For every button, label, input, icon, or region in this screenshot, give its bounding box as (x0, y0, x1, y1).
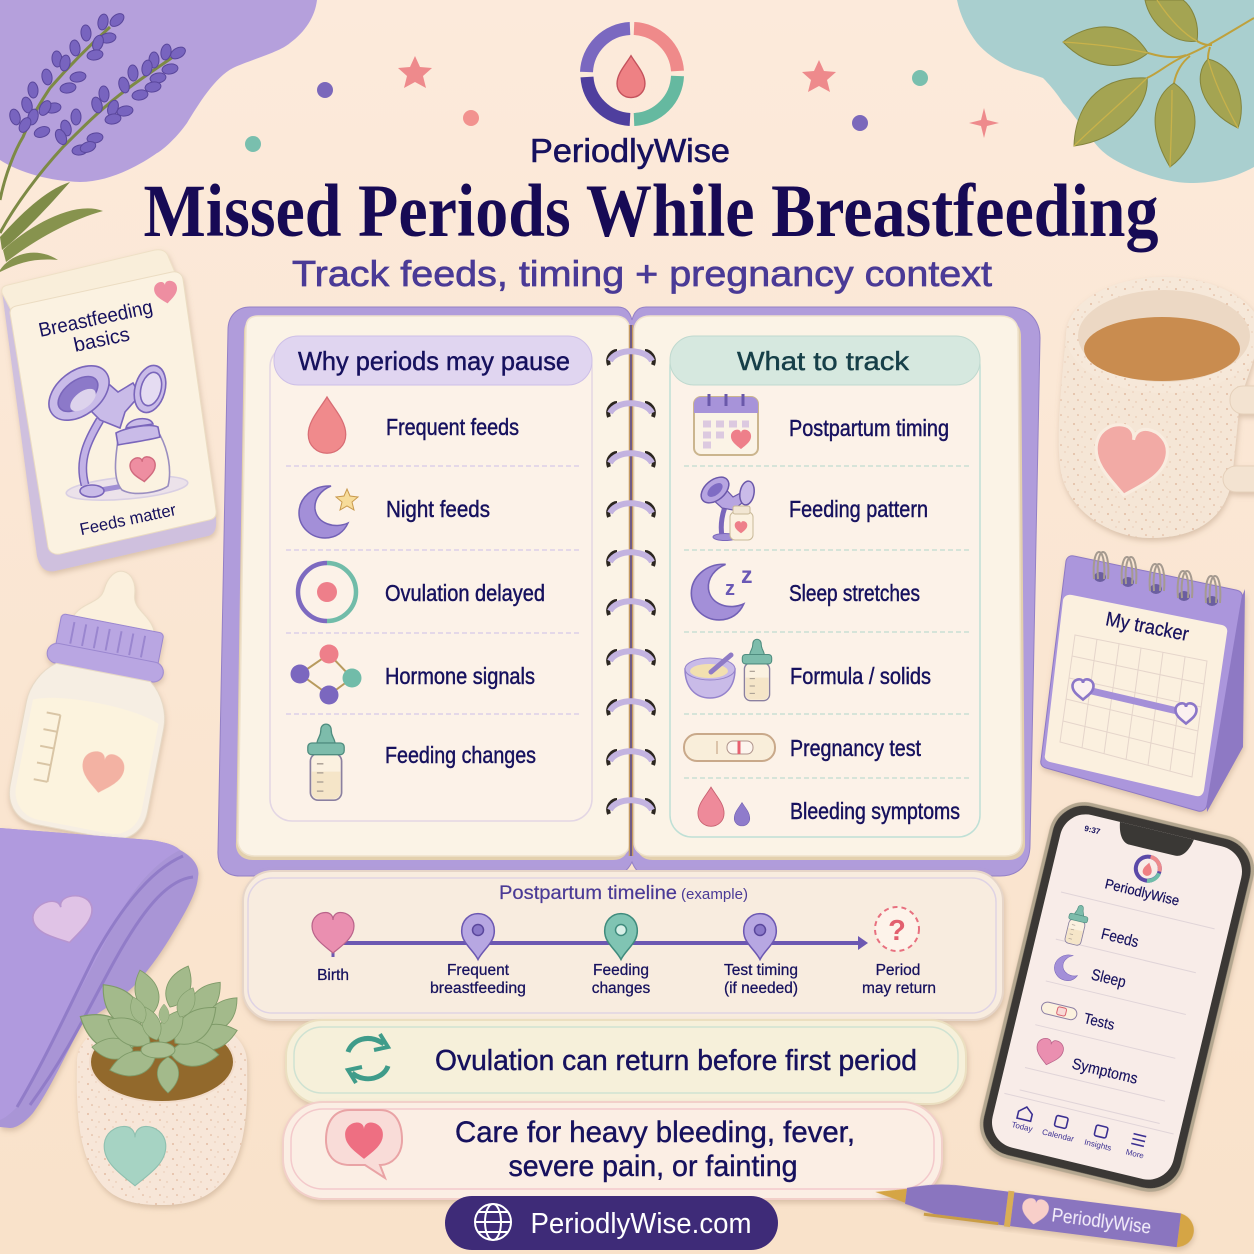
mug handle (1223, 386, 1254, 492)
row: postpartum timing (694, 394, 949, 455)
panel: postpartum timeline: (example) (681, 886, 748, 903)
booklet heart (153, 280, 179, 305)
milestone: feeding changes: Feeding (593, 962, 649, 979)
smartphone (975, 797, 1254, 1197)
callout: ovulation: Ovulation can return before first period (435, 1045, 917, 1077)
tracked span between hearts (1072, 679, 1196, 724)
row: formula / solids (685, 639, 931, 701)
booklet: breastfeeding basics: basics (72, 323, 132, 357)
row: feeding pattern: Feeding pattern (789, 496, 928, 522)
milestone: test timing (724, 914, 798, 997)
icon: globe (475, 1204, 511, 1240)
row: sleep stretches: z (741, 562, 752, 588)
panel: postpartum timeline (243, 871, 1003, 1020)
logo: PeriodlyWise (530, 132, 730, 169)
row: sleep stretches: Sleep stretches (789, 580, 920, 606)
phone app logo: PeriodlyWise (1103, 875, 1181, 909)
row: feeding changes (308, 724, 536, 800)
confetti dots and stars (245, 56, 999, 152)
milestone: birth (312, 912, 354, 984)
milestone: feeding changes: changes (592, 980, 651, 997)
left page header: Why periods may pause (298, 346, 570, 376)
booklet caption: Feeds matter (78, 500, 178, 539)
milestone: frequent breastfeeding: Frequent (447, 962, 510, 979)
row: bleeding symptoms: Bleeding symptoms (790, 798, 960, 824)
row: ovulation delayed: Ovulation delayed (385, 580, 545, 606)
row: sleep stretches: z (725, 578, 735, 600)
right page header: What to track (737, 346, 910, 376)
folded blanket (0, 828, 198, 1128)
booklet: breastfeeding basics (2, 250, 216, 571)
notebook cover (218, 307, 1040, 876)
callout: ovulation (286, 1020, 966, 1104)
row: frequent feeds (308, 397, 519, 453)
row: ovulation delayed (298, 563, 545, 621)
baby bottle (4, 558, 192, 845)
right page (634, 316, 1025, 860)
milestone: period may return: Period (876, 962, 920, 979)
booklet title: Breastfeeding (37, 296, 155, 342)
phone nav bar: Calendar (1041, 1127, 1075, 1144)
phone status time: 9:37 (1083, 824, 1102, 836)
calendar rings (1094, 552, 1220, 606)
open notebook (218, 307, 1040, 876)
left page (236, 316, 630, 860)
pen: PeriodlyWise (1050, 1205, 1152, 1239)
callout: care warning: severe pain, or fainting (508, 1150, 798, 1183)
calendar label: My tracker (1104, 608, 1191, 646)
calendar grid (1060, 635, 1207, 777)
callout: care warning: Care for heavy bleeding, fever, (455, 1116, 855, 1149)
phone row: symptoms (1033, 1037, 1142, 1088)
subtitle: Track feeds, timing + pregnancy context (292, 253, 992, 294)
phone app logo (1103, 848, 1188, 909)
logo (530, 28, 730, 169)
coffee mug (1059, 277, 1254, 538)
row: night feeds: Night feeds (386, 496, 490, 522)
milestone: period may return (862, 907, 936, 997)
phone nav bar: More (1125, 1147, 1145, 1161)
phone notch (1115, 822, 1194, 859)
breast pump illustration (39, 355, 189, 504)
row: hormone signals: Hormone signals (385, 663, 535, 689)
right page header (670, 336, 980, 385)
phone row: feeds (1063, 903, 1144, 959)
lavender sprigs (0, 11, 187, 272)
row: sleep stretches (691, 562, 920, 620)
website pill (445, 1196, 778, 1250)
row: feeding pattern (696, 472, 928, 540)
milestone: test timing: (if needed) (724, 980, 798, 997)
row: night feeds (299, 486, 490, 538)
callout: care warning (283, 1102, 942, 1199)
phone row: tests (1039, 1000, 1116, 1034)
milestone: birth: Birth (317, 967, 349, 984)
timeline arrow (333, 936, 868, 957)
leaf branch (1063, 0, 1254, 167)
timeline heading: Postpartum timeline (499, 883, 677, 904)
phone row: sleep (1052, 952, 1129, 994)
phone nav bar (1011, 1104, 1149, 1161)
milestone: test timing: Test timing (724, 962, 798, 979)
phone nav bar: Today (1011, 1120, 1033, 1134)
row: feeding changes: Feeding changes (385, 742, 536, 768)
row: bleeding symptoms (698, 787, 960, 826)
pen (873, 1174, 1196, 1250)
desk calendar: my tracker (1041, 552, 1245, 812)
row: pregnancy test: Pregnancy test (790, 735, 922, 761)
website pill: PeriodlyWise.com (530, 1208, 752, 1240)
decorative blob: lavender corner (0, 0, 317, 182)
phone row: sleep: Sleep (1089, 967, 1128, 991)
spiral binding (608, 325, 654, 856)
phone row: tests: Tests (1082, 1010, 1116, 1034)
row: pregnancy test (684, 734, 922, 761)
milestone: frequent breastfeeding (430, 914, 526, 997)
phone row: feeds: Feeds (1099, 926, 1140, 951)
row: formula / solids: Formula / solids (790, 663, 931, 689)
milestone: period may return: ? (888, 915, 906, 947)
icon: speech heart (326, 1110, 402, 1178)
decorative blob: teal corner (957, 0, 1254, 183)
left page header (274, 336, 592, 385)
succulent rosette (73, 961, 245, 1093)
icon: cycle arrows (348, 1034, 388, 1083)
row: postpartum timing: Postpartum timing (789, 415, 949, 441)
row: frequent feeds: Frequent feeds (386, 414, 519, 440)
row: hormone signals (290, 644, 535, 704)
phone nav bar: Insights (1083, 1138, 1112, 1153)
phone row: symptoms: Symptoms (1070, 1056, 1139, 1088)
milestone: period may return: may return (862, 980, 936, 997)
milestone: frequent breastfeeding: breastfeeding (430, 980, 526, 997)
succulent pot (73, 961, 247, 1205)
milestone: feeding changes (592, 914, 651, 997)
